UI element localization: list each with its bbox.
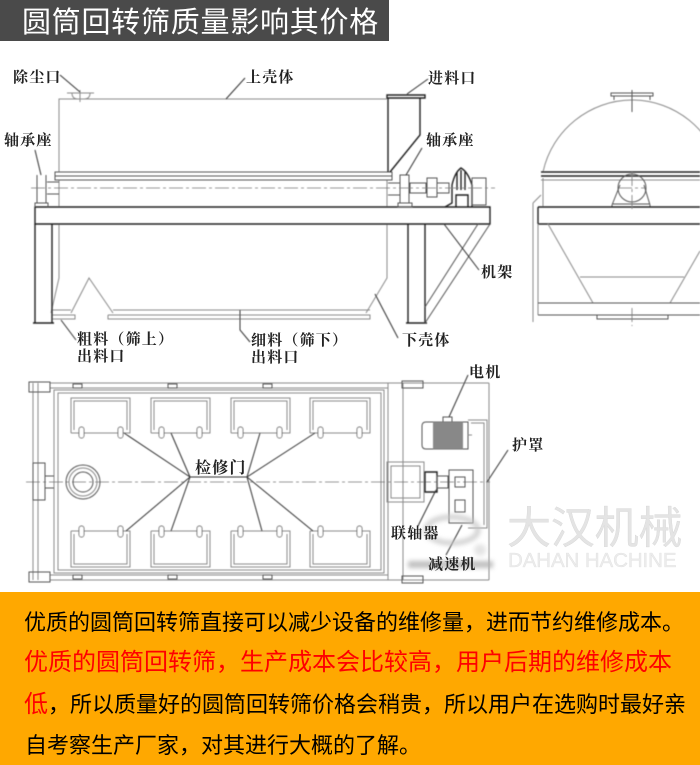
frame beam: [35, 207, 490, 224]
rail blocks: [73, 384, 272, 579]
watermark: [408, 504, 682, 572]
left end bars: [33, 383, 38, 580]
watermark: DAHAN HACHINE: [508, 549, 676, 572]
plan view labels: 减速机: [428, 555, 477, 573]
title banner: 圆筒回转筛质量影响其价格: [22, 6, 379, 39]
bottom frame: [538, 303, 700, 319]
front view labels: 细料（筛下）: [251, 331, 348, 349]
coupling: [425, 472, 437, 492]
plan view labels: 联轴器: [391, 525, 440, 542]
port circle: [66, 465, 100, 499]
front view labels: 轴承座: [426, 131, 475, 149]
leader arrows for inspection doors: [124, 433, 315, 531]
upper shell: [59, 99, 387, 207]
dust outlet: [67, 90, 94, 102]
front view labels: 上壳体: [246, 68, 295, 86]
plan centre line: [26, 481, 490, 483]
side beam: [538, 207, 700, 224]
right leg: [406, 224, 427, 323]
guard: [468, 420, 487, 528]
left leg: [33, 224, 54, 323]
top flange: [611, 90, 653, 112]
plan view labels: 检修门: [195, 458, 247, 477]
bearing box: [387, 462, 424, 502]
drum circle and support: [618, 174, 646, 202]
front view labels: 轴承座: [4, 131, 53, 149]
plan view drawing: [26, 375, 508, 583]
front view labels: 机架: [481, 263, 513, 281]
front view labels: 出料口: [251, 348, 300, 366]
description line 1: 优质的圆筒回转筛直接可以减少设备的维修量，进而节约维修成本。: [24, 610, 684, 635]
right end frame: [388, 383, 489, 580]
front elevation drawing: [31, 75, 495, 342]
side leg: [533, 195, 541, 322]
rails: [50, 383, 489, 580]
plan view labels: [195, 363, 544, 573]
description panel: [0, 592, 700, 765]
front view labels: 除尘口: [13, 68, 62, 86]
watermark swirl: [408, 517, 493, 568]
left shaft block: [33, 463, 54, 500]
description line 3: 低，所以质量好的圆筒回转筛价格会稍贵，所以用户在选购时最好亲: [24, 691, 686, 718]
front view labels: [4, 68, 513, 366]
lower shell: [51, 224, 387, 313]
reducer: [449, 470, 473, 523]
leader lines: [35, 75, 479, 342]
coarse outlet hopper: [52, 278, 370, 319]
dome: [543, 100, 700, 172]
leader lines for drive: [418, 375, 508, 555]
shell rectangle: [54, 390, 384, 573]
description line 2 highlighted: 优质的圆筒回转筛，生产成本会比较高，用户后期的维修成本: [24, 649, 672, 676]
feed hopper: [387, 95, 425, 172]
centre line: [31, 187, 495, 189]
drive train: [388, 168, 486, 207]
corner flanges: [29, 381, 423, 583]
motor: [422, 417, 472, 449]
inspection doors top row: [71, 398, 370, 438]
description line 4: 自考察生产厂家，对其进行大概的了解。: [25, 733, 421, 758]
inspection doors bottom row: [71, 526, 370, 567]
front view labels: 进料口: [428, 69, 477, 87]
shell flange: [55, 172, 392, 180]
cone hopper: [548, 224, 700, 303]
plan view labels: 电机: [469, 363, 501, 381]
door latches top: [79, 427, 362, 438]
front view labels: 出料口: [77, 347, 126, 365]
watermark: 大汉机械: [507, 504, 682, 553]
side strip: [541, 172, 700, 176]
left bearing: [35, 175, 59, 207]
side elevation drawing: [533, 90, 700, 326]
door latches bottom: [79, 526, 362, 537]
front view labels: 粗料（筛上）: [77, 330, 174, 348]
front view labels: 下壳体: [402, 331, 451, 349]
plan view labels: 护罩: [512, 436, 544, 454]
diagonal brace: [425, 224, 490, 323]
